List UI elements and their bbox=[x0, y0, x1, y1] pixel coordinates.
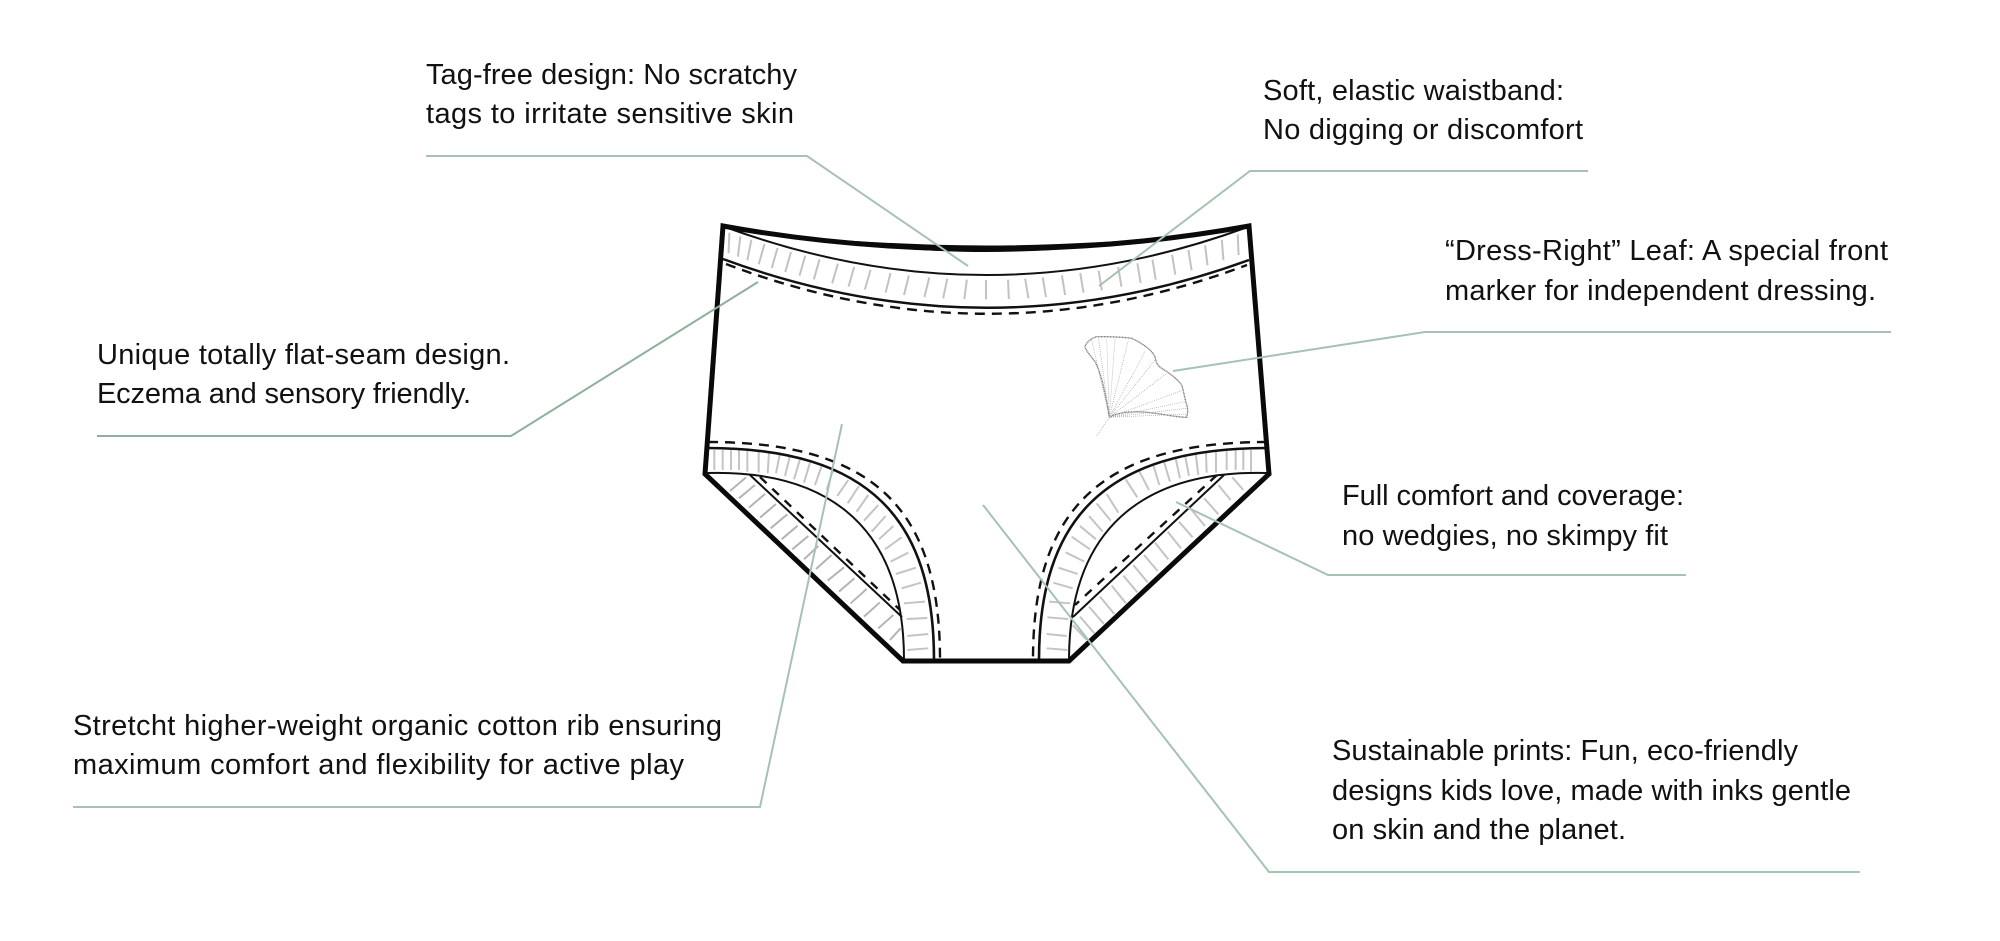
callout text: Soft, elastic waistband: bbox=[1263, 75, 1564, 107]
callout: organic cotton rib bbox=[73, 424, 842, 807]
callout: elastic waistband bbox=[1099, 75, 1588, 286]
callout text bbox=[426, 59, 798, 130]
callout text: Full comfort and coverage: bbox=[1342, 480, 1684, 512]
callout text: “Dress-Right” Leaf: A special front bbox=[1445, 235, 1888, 267]
leader line bbox=[1099, 171, 1588, 286]
callout: dress-right leaf bbox=[1173, 235, 1891, 371]
garment outline bbox=[705, 226, 1269, 661]
leader line bbox=[1173, 332, 1891, 371]
callout text: Tag-free design: No scratchy bbox=[426, 59, 798, 91]
callout text: Stretcht higher-weight organic cotton rib ensuring bbox=[73, 710, 722, 742]
callout text bbox=[97, 339, 510, 410]
leg seams bbox=[707, 442, 1267, 660]
callout text bbox=[73, 710, 722, 781]
left leg rib ticks bbox=[714, 450, 928, 650]
callout text bbox=[1332, 735, 1851, 846]
leader line bbox=[1176, 502, 1686, 575]
callout text: Unique totally flat-seam design. bbox=[97, 339, 510, 371]
callout text: on skin and the planet. bbox=[1332, 814, 1626, 846]
callout text: no wedgies, no skimpy fit bbox=[1342, 520, 1668, 552]
callout text bbox=[1342, 480, 1684, 552]
leader line bbox=[426, 156, 968, 266]
callout text: designs kids love, made with inks gentle bbox=[1332, 775, 1851, 807]
callout text: maximum comfort and flexibility for active play bbox=[73, 749, 684, 781]
leader line bbox=[97, 282, 758, 436]
icon: ginkgo leaf bbox=[1085, 337, 1188, 436]
callout text bbox=[1263, 75, 1583, 146]
callout: tag-free design bbox=[426, 59, 968, 266]
callout text: marker for independent dressing. bbox=[1445, 275, 1876, 307]
waistband seams bbox=[723, 228, 1249, 314]
callout text: tags to irritate sensitive skin bbox=[426, 98, 794, 130]
callout: sustainable prints bbox=[983, 505, 1860, 872]
callout text: No digging or discomfort bbox=[1263, 114, 1583, 146]
callout: flat-seam design bbox=[97, 282, 758, 436]
callout text: Sustainable prints: Fun, eco-friendly bbox=[1332, 735, 1798, 767]
garment illustration bbox=[705, 226, 1269, 661]
waistband rib ticks bbox=[729, 233, 1239, 299]
right leg rib ticks bbox=[1047, 450, 1251, 650]
callout: full comfort bbox=[1176, 480, 1686, 575]
callout text bbox=[1445, 235, 1888, 307]
callout text: Eczema and sensory friendly. bbox=[97, 378, 471, 410]
leader line bbox=[983, 505, 1860, 872]
leader line bbox=[73, 424, 842, 807]
